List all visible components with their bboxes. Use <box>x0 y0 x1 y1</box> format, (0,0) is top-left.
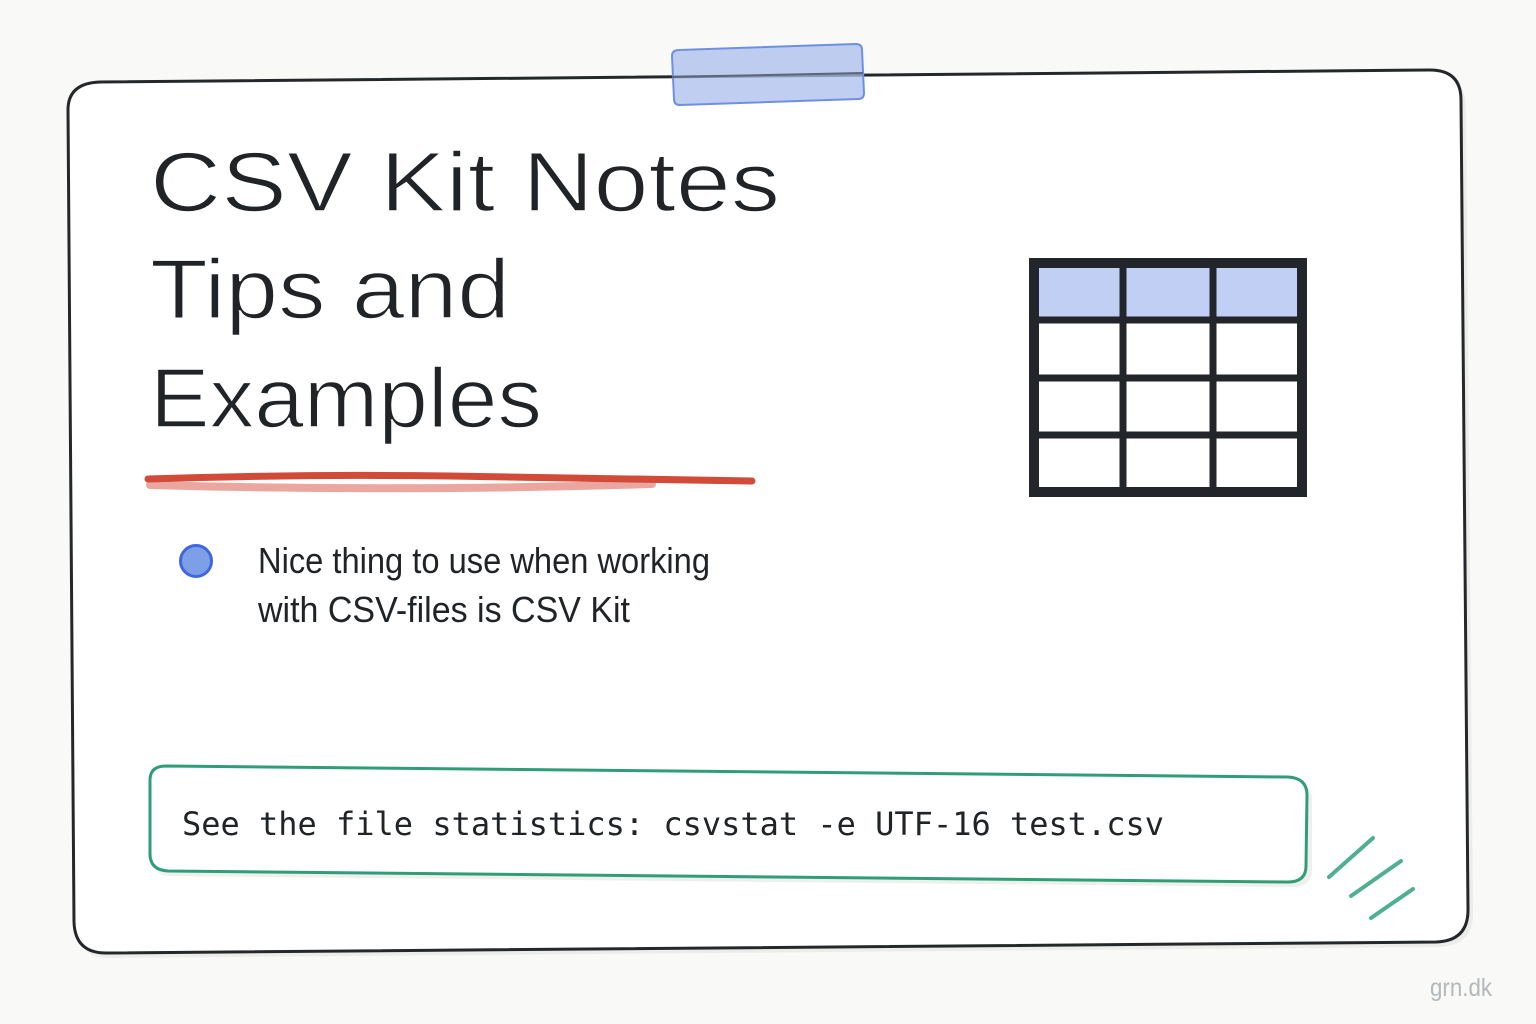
code box <box>150 766 1312 887</box>
title <box>150 135 780 445</box>
title underline <box>148 475 752 488</box>
code box: See the file statistics: csvstat -e UTF-16 test.csv <box>182 805 1164 843</box>
bullet icon <box>180 546 212 576</box>
bullet text: with CSV-files is CSV Kit <box>257 589 630 630</box>
panel: main card <box>68 70 1473 958</box>
title: Examples <box>150 351 542 445</box>
title: Tips and <box>150 242 510 336</box>
title: CSV Kit Notes <box>150 135 780 229</box>
bullet text: Nice thing to use when working <box>258 540 710 581</box>
icon: table <box>1034 263 1302 492</box>
decorative green hatch <box>1329 838 1413 918</box>
bullet text <box>257 540 710 630</box>
tape <box>672 44 864 105</box>
watermark: grn.dk <box>1430 974 1492 1002</box>
